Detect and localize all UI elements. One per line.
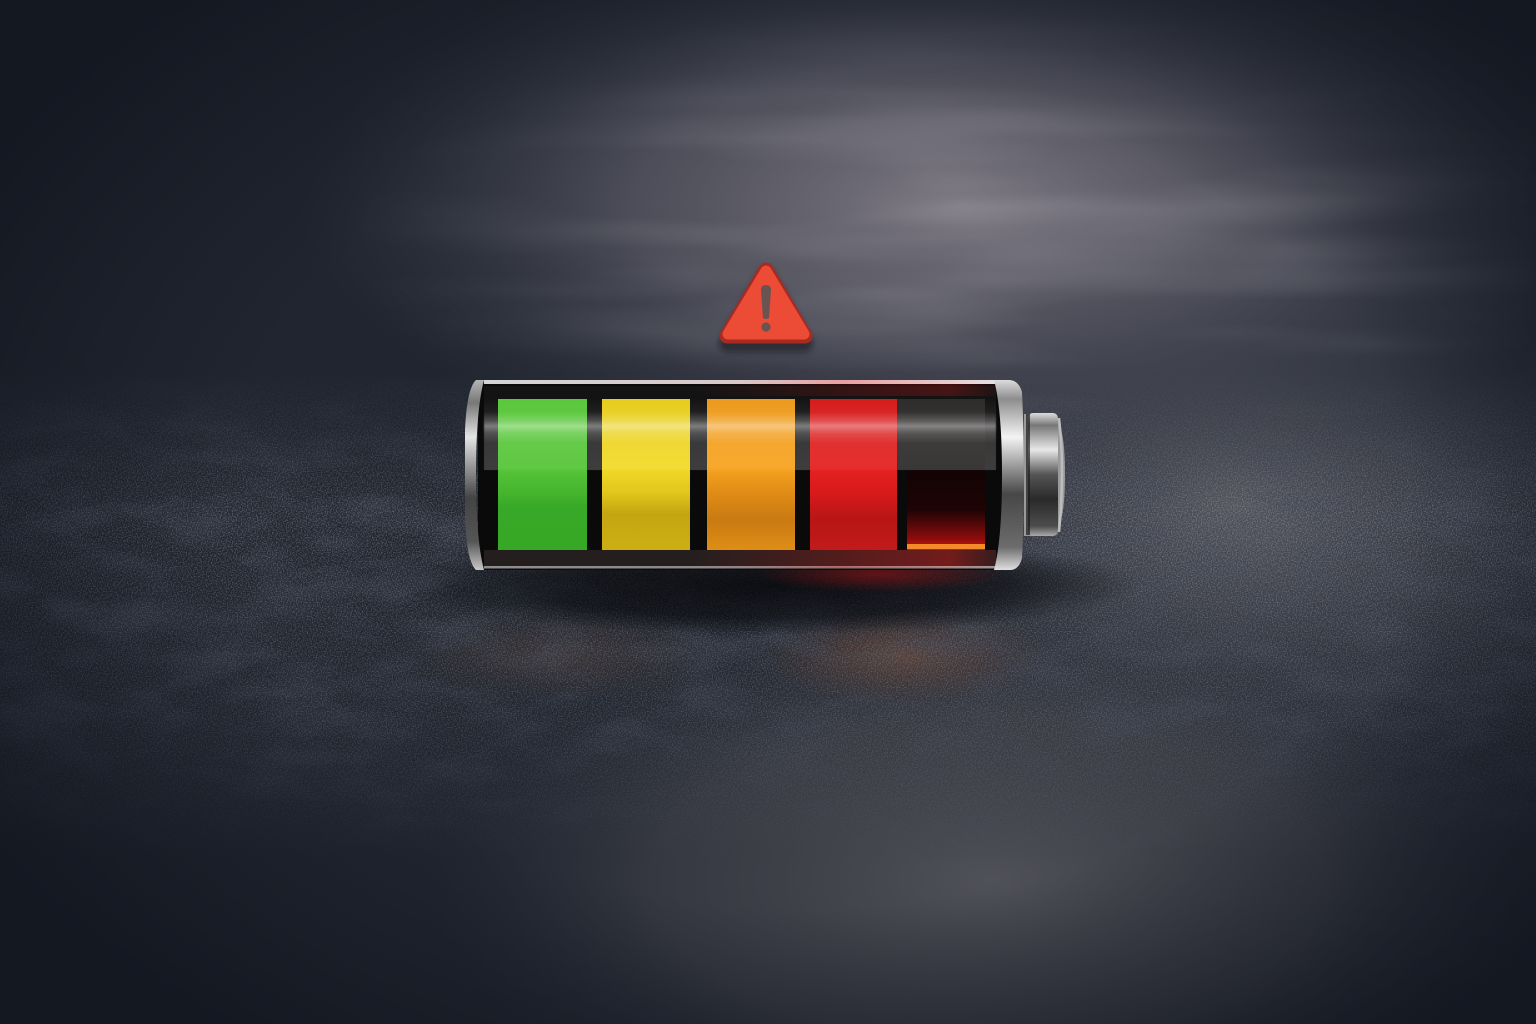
glass gloss band [484,399,996,470]
right cap [994,380,1024,570]
terminal [1024,413,1065,536]
glass body [478,380,1003,570]
cell: empty [897,399,985,550]
top and bottom rim highlights [484,380,996,384]
cell: red [810,399,897,550]
cell: orange [707,399,795,550]
battery [465,380,1065,570]
cell: green [498,399,587,550]
left cap [465,380,484,570]
exclamation mark [761,285,771,332]
warning triangle icon [727,270,805,343]
glass gloss in the gaps between cells [484,399,996,470]
cell: yellow [602,399,690,550]
battery shadow [400,535,1140,635]
critical charge line [907,544,985,549]
